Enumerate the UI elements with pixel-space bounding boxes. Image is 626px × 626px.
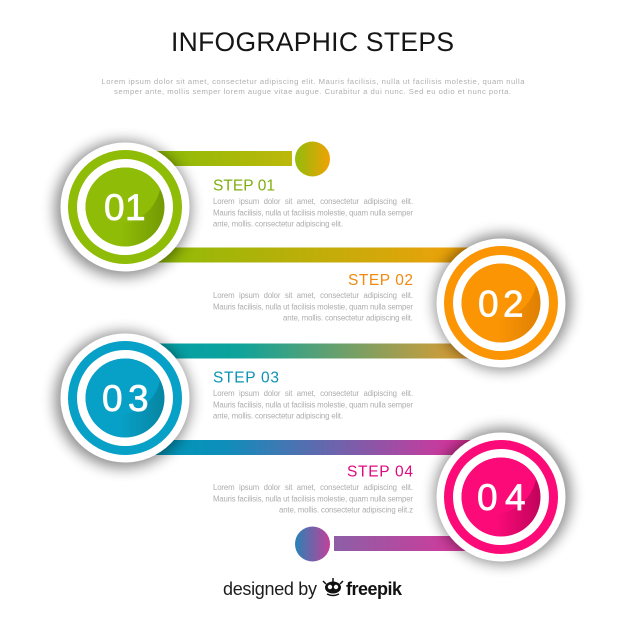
body: step 04: Mauris facilisis, nulla ut facilisis molestie, quam nulla semper xyxy=(213,494,413,504)
badge: step 02 xyxy=(435,232,571,370)
title: INFOGRAPHIC STEPS xyxy=(171,27,454,57)
body: step 02: Lorem ipsum dolor sit amet, consectetur adipiscing elit. xyxy=(213,291,413,300)
heading: step 01: STEP 01 xyxy=(213,178,275,195)
body: step 03: Mauris facilisis, nulla ut facilisis molestie, quam nulla semper xyxy=(213,400,413,410)
badge: step 03 xyxy=(55,327,191,468)
body: step 03: ante, mollis. consectetur adipiscing elit. xyxy=(213,412,343,420)
bar: step 2 to step 3 connector xyxy=(150,344,475,358)
intro text: Lorem ipsum dolor sit amet, consectetur adipiscing elit. Mauris facilisis, nulla ut facilisis molestie, quam nulla xyxy=(102,77,525,86)
body: step 02: Mauris facilisis, nulla ut facilisis molestie, quam nulla semper xyxy=(213,302,413,312)
heading: step 04: STEP 04 xyxy=(347,464,413,481)
heading: step 02: STEP 02 xyxy=(348,272,413,289)
icon: small green-orange circle xyxy=(295,142,330,176)
icon: small blue-magenta circle xyxy=(295,526,330,562)
step 3 text block xyxy=(213,369,413,420)
badge: step 01 xyxy=(55,136,191,277)
bar: step 1 to step 2 connector xyxy=(150,248,475,262)
badge: step 03: 03 xyxy=(102,378,149,419)
badge: step 02: 02 xyxy=(478,284,524,324)
body: step 02 xyxy=(213,291,413,322)
bar: step 3 to step 4 connector xyxy=(150,440,475,455)
body: step 02: ante, mollis. consectetur adipiscing elit. xyxy=(283,314,413,322)
bar: step 1 top connector xyxy=(150,151,292,166)
body: step 04: Lorem ipsum dolor sit amet, consectetur adipiscing elit. xyxy=(213,483,413,492)
badge: step 01: 01 xyxy=(104,187,146,228)
body: step 01: Mauris facilisis, nulla ut facilisis molestie, quam nulla semper xyxy=(213,208,413,218)
body: step 01: Lorem ipsum dolor sit amet, consectetur adipiscing elit. xyxy=(213,197,413,206)
body: step 01 xyxy=(213,197,413,228)
badge: step 04: 04 xyxy=(477,477,526,518)
step 4 text block xyxy=(213,464,413,514)
step 1 text block xyxy=(213,178,413,228)
heading: step 03: STEP 03 xyxy=(213,369,279,386)
body: step 03: Lorem ipsum dolor sit amet, consectetur adipiscing elit. xyxy=(213,389,413,398)
bar: step 4 bottom connector xyxy=(334,536,474,551)
icon: freepik logo xyxy=(323,578,343,596)
step 2 text block xyxy=(213,272,413,322)
footer credit: designed by xyxy=(223,579,317,599)
footer credit: freepik xyxy=(346,579,403,599)
body: step 04 xyxy=(213,483,413,514)
footer credit xyxy=(223,578,403,599)
body: step 04: ante, mollis. consectetur adipiscing elit.z xyxy=(279,506,413,514)
body: step 01: ante, mollis. consectetur adipiscing elit. xyxy=(213,220,343,228)
intro text xyxy=(102,77,525,96)
body: step 03 xyxy=(213,389,413,420)
badge: step 04 xyxy=(435,426,571,564)
intro text: semper ante, mollis semper lorem augue vitae augue. Curabitur a dui nunc. Sed eu odio et nunc porta. xyxy=(114,87,511,96)
